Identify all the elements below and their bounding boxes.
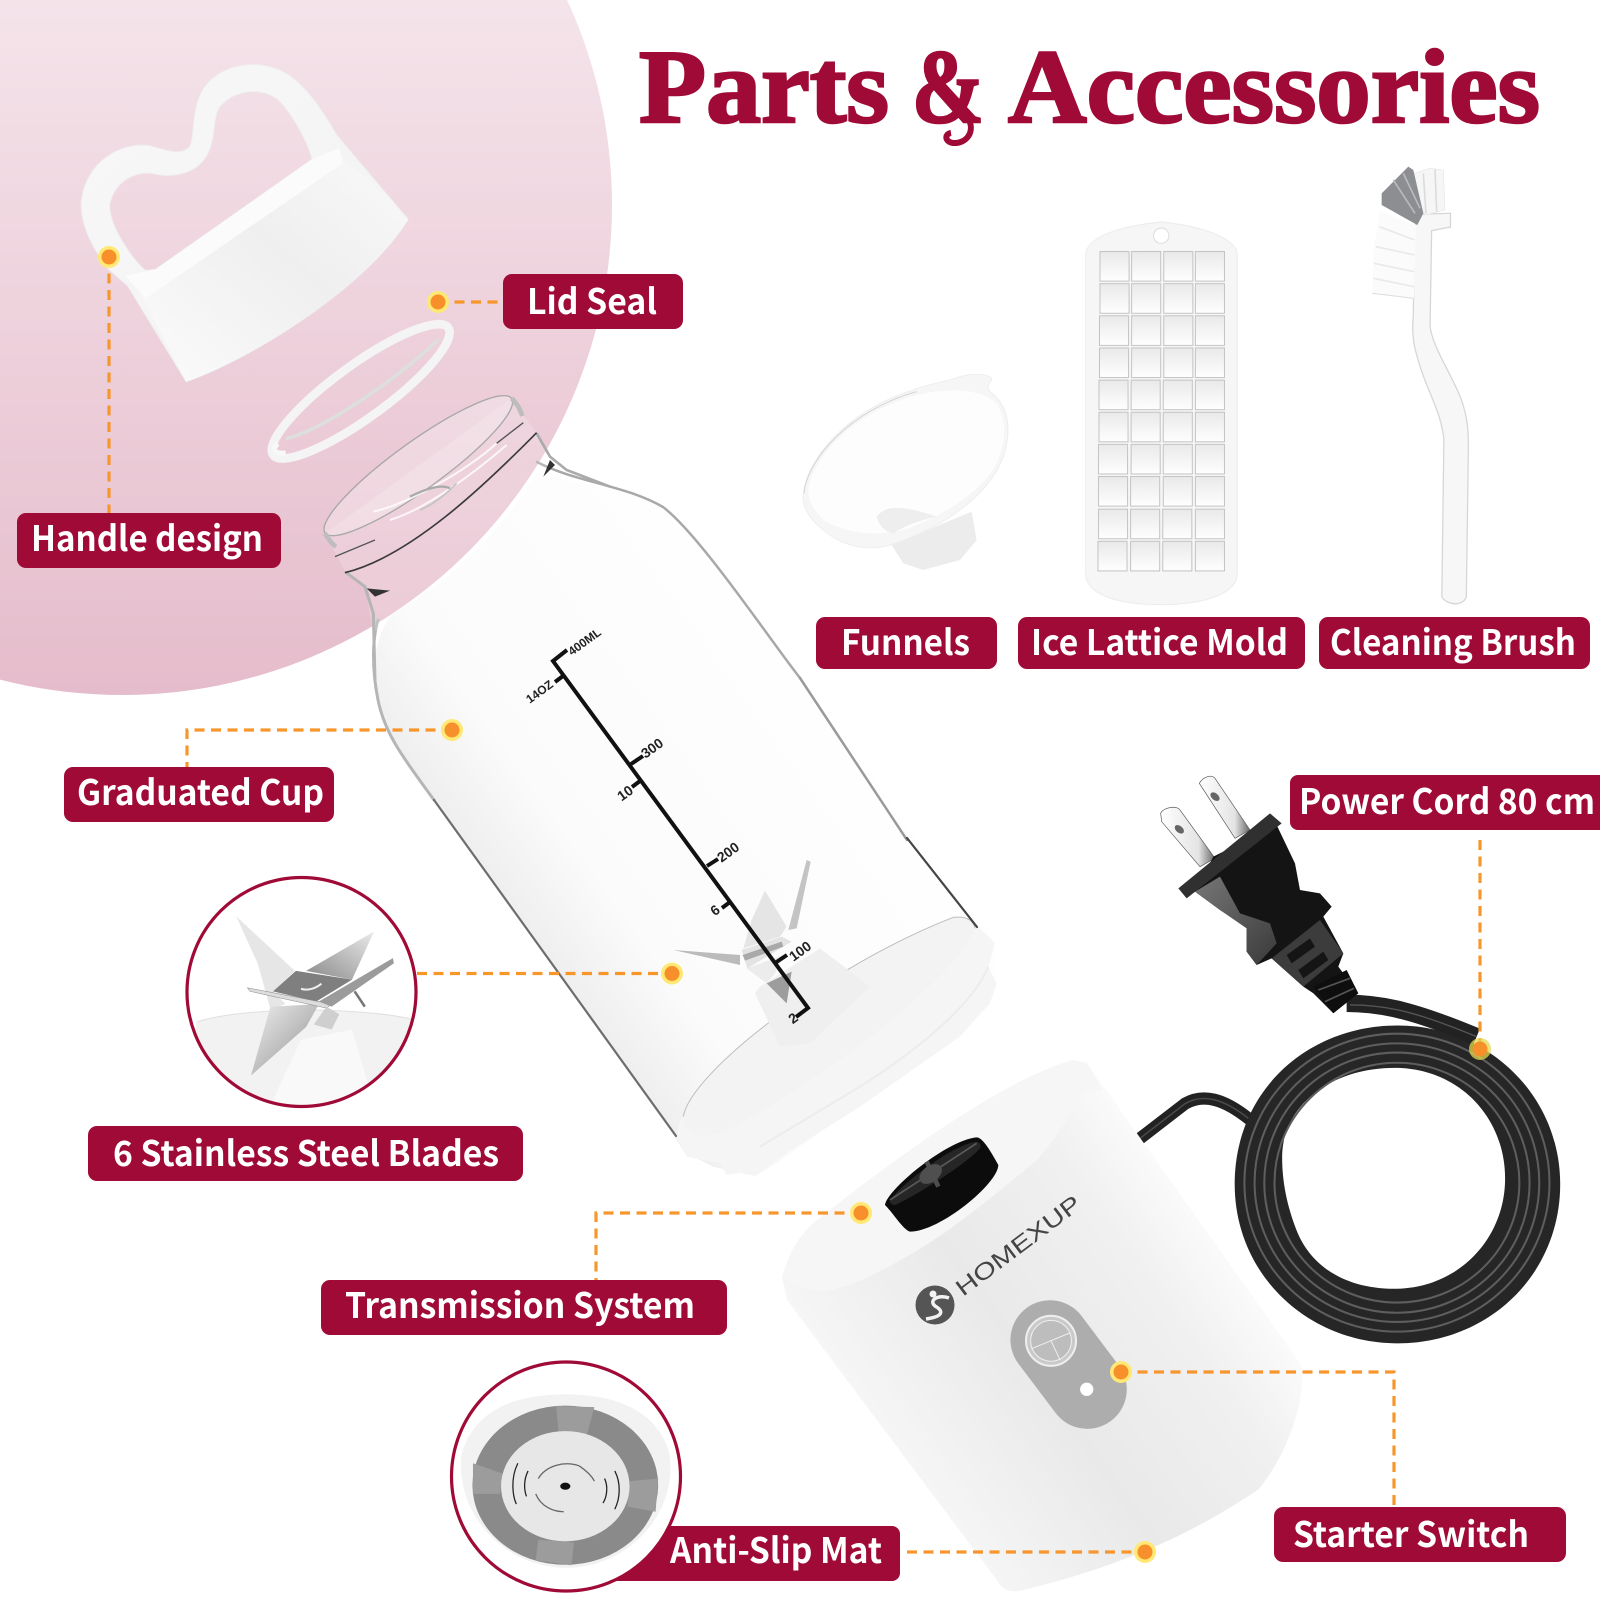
callout: starter switch: Starter Switch [1293, 1507, 1529, 1558]
title: Parts [639, 28, 889, 145]
title: & [912, 28, 984, 145]
measurement scale: 400ML [565, 625, 604, 658]
cup body [375, 473, 996, 1176]
callout: power cord [1290, 774, 1600, 1060]
measurement scale: 6 [707, 901, 723, 919]
blades detail circle [187, 878, 416, 1116]
lid with handle [81, 65, 408, 382]
logo mark [916, 1286, 954, 1324]
callout: stainless steel blades: 6 Stainless Steel Blades [113, 1126, 499, 1177]
measurement scale: 10 [614, 782, 636, 804]
callout: graduated cup: Graduated Cup [77, 765, 324, 816]
motor shaft cap [885, 1137, 998, 1232]
blade inside cup [673, 860, 811, 1003]
callout: graduated cup [64, 719, 463, 822]
title: Accessories [1008, 28, 1540, 145]
callout: starter switch [1110, 1361, 1566, 1562]
callout: lid seal: Lid Seal [527, 274, 657, 325]
callout: anti-slip mat: Anti-Slip Mat [669, 1523, 882, 1574]
label: cleaning brush: Cleaning Brush [1330, 615, 1576, 666]
callout: transmission system: Transmission System [345, 1278, 695, 1329]
label: ice lattice mold: Ice Lattice Mold [1031, 615, 1288, 666]
background pink circle [0, 0, 612, 695]
base top collar [782, 1060, 1102, 1291]
callout: lid seal [427, 274, 683, 329]
power cord connecting wire [1141, 1098, 1249, 1138]
title [639, 28, 1540, 145]
brand wordmark: HOMEXUP [950, 1190, 1086, 1301]
callout: transmission system [321, 1202, 872, 1335]
power plug [1161, 776, 1477, 1037]
glass cup [311, 379, 997, 1176]
base body [782, 1060, 1302, 1591]
cleaning brush [1372, 167, 1468, 604]
cup base [677, 917, 997, 1175]
blender base [782, 1060, 1302, 1591]
cup outlines [374, 462, 977, 1136]
measurement scale: 2 [785, 1009, 801, 1027]
measurement scale: 300 [638, 735, 666, 761]
measurement scale: 14OZ [523, 677, 556, 706]
label: funnels: Funnels [841, 615, 970, 666]
cup neck [311, 379, 610, 680]
anti-slip label background [612, 1526, 900, 1581]
anti-slip detail circle [452, 1362, 680, 1591]
power cord coil [1235, 1026, 1560, 1343]
brush handle [1413, 213, 1468, 604]
callout: power cord: Power Cord 80 cm [1299, 774, 1595, 825]
callout: handle design: Handle design [31, 511, 263, 562]
callout: handle design [17, 246, 281, 568]
measurement scale: 100 [786, 938, 814, 964]
switch plate [1026, 1316, 1093, 1396]
callout: stainless steel blades [88, 962, 683, 1181]
callout: anti-slip mat [669, 1523, 1156, 1574]
funnel [803, 374, 1008, 570]
ice lattice mold [1086, 222, 1237, 605]
lid seal ring [258, 306, 464, 476]
measurement scale [523, 625, 814, 1027]
measurement scale: 200 [714, 839, 742, 865]
bristles [1372, 167, 1445, 298]
